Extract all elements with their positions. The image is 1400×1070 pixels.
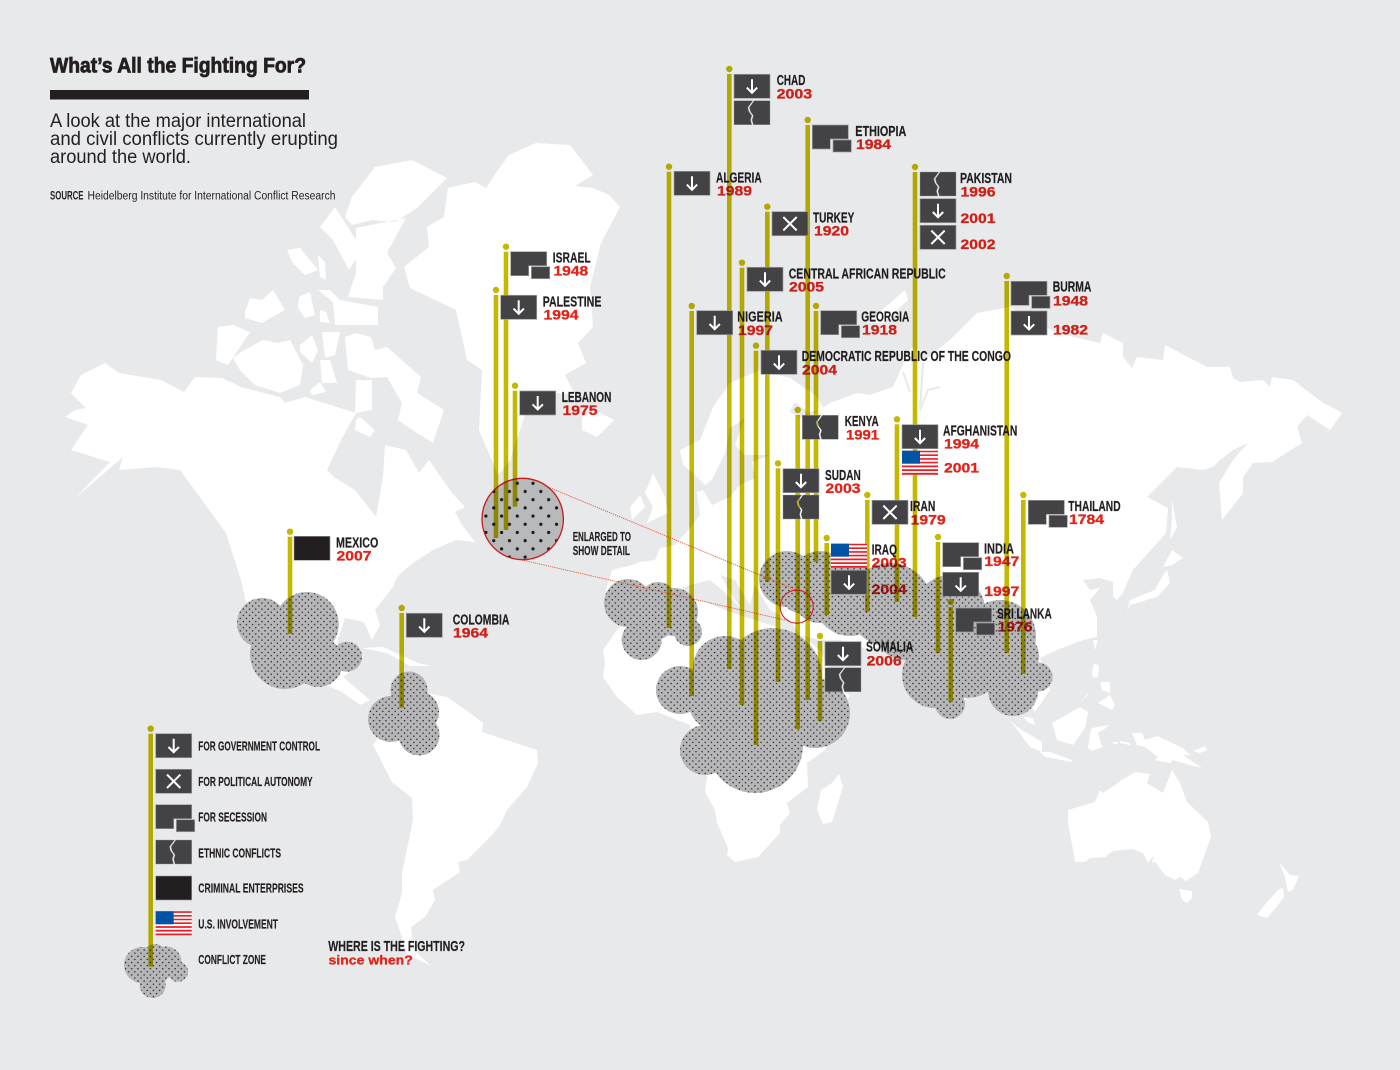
- country: Lebanon: 1975: [562, 403, 598, 418]
- country: Palestine: PALESTINE: [543, 295, 602, 311]
- legend: political autonomy: [156, 769, 313, 793]
- country: Mexico: [287, 528, 378, 634]
- country: Sudan: SUDAN: [825, 468, 861, 484]
- Southeast Asian islands: [1010, 640, 1130, 762]
- Sakhalin: [1170, 500, 1177, 540]
- legend: ethnic conflicts: ETHNIC CONFLICTS: [198, 846, 281, 860]
- country: India: 1997: [984, 584, 1019, 599]
- country: India: [935, 534, 1019, 653]
- New Zealand: [1257, 862, 1299, 918]
- legend: conflict zone label: CONFLICT ZONE: [198, 953, 266, 967]
- country: Democratic Republic of the Congo: [753, 342, 1011, 745]
- country: Afghanistan: 2001: [944, 460, 980, 475]
- Arctic islands: [216, 160, 447, 443]
- country: Ethiopia: 1984: [856, 137, 892, 152]
- country: Turkey: TURKEY: [813, 211, 855, 227]
- connector lines to inset: [522, 487, 796, 620]
- country: Pakistan: 2002: [960, 237, 996, 252]
- country: Nigeria: NIGERIA: [737, 310, 783, 326]
- country: Nigeria: 1997: [738, 323, 773, 338]
- country: Chad: 2003: [777, 86, 813, 101]
- country: Ethiopia: [804, 117, 907, 700]
- country: Burma: 1948: [1053, 293, 1089, 308]
- Madagascar: [817, 774, 843, 824]
- country: Colombia: 1964: [453, 626, 489, 641]
- legend: pole: [148, 726, 154, 967]
- title rule: [50, 90, 309, 100]
- country: Thailand: THAILAND: [1068, 499, 1121, 515]
- legend: criminal enterprises: CRIMINAL ENTERPRISES: [198, 882, 304, 896]
- country: Afghanistan: [894, 416, 1017, 602]
- Japan: [1127, 550, 1183, 612]
- country: Kenya: KENYA: [845, 414, 879, 430]
- legend key heading: WHERE IS THE FIGHTING?: [328, 938, 465, 955]
- legend: ethnic conflicts: [156, 840, 281, 864]
- legend: [120, 726, 320, 1002]
- British Isles: [630, 473, 668, 523]
- country: Turkey: 1920: [814, 224, 849, 239]
- detail marker circle: [780, 590, 813, 623]
- country: Algeria: 1989: [717, 184, 752, 199]
- country: Somalia: SOMALIA: [866, 640, 914, 656]
- country: Colombia: [398, 605, 510, 708]
- legend: secession: FOR SECESSION: [198, 811, 267, 825]
- legend: criminal enterprises: [156, 876, 304, 900]
- country: Lebanon: [512, 382, 611, 507]
- legend: U.S. involvement: [156, 911, 278, 935]
- country: Iraq: 2003: [872, 556, 907, 571]
- world map: [65, 143, 1342, 965]
- zone: North Africa: [604, 579, 702, 660]
- country: Sudan: [775, 460, 861, 682]
- country: Mexico: 2007: [336, 549, 372, 564]
- country: Sudan: 2003: [826, 481, 861, 496]
- country: Chad: [726, 66, 813, 669]
- country: India: 1947: [984, 554, 1019, 569]
- country: Iraq: [824, 535, 907, 615]
- North America: [65, 363, 475, 705]
- country: Palestine: 1994: [544, 308, 579, 322]
- source: SOURCE: [50, 190, 84, 202]
- country: Central African Republic: 2005: [789, 279, 825, 294]
- country: Israel: ISRAEL: [553, 250, 591, 266]
- country: Mexico: MEXICO: [336, 535, 378, 551]
- zone: Sub-Saharan Africa: [650, 625, 855, 797]
- country: Afghanistan: 1994: [944, 436, 980, 451]
- zone: Mexico: [237, 592, 362, 689]
- country: Colombia: COLOMBIA: [453, 613, 510, 629]
- country: India: INDIA: [984, 541, 1014, 557]
- Africa: [603, 600, 850, 862]
- Cuba and Hispaniola: [362, 647, 431, 666]
- subtitle: around the world.: [50, 147, 191, 168]
- subtitle: [50, 111, 338, 168]
- conflict zones: [230, 548, 1055, 797]
- Eurasia: [606, 307, 1342, 715]
- country: Ethiopia: ETHIOPIA: [855, 124, 907, 140]
- country: Burma: 1982: [1053, 323, 1088, 338]
- country: Afghanistan: AFGHANISTAN: [943, 423, 1017, 439]
- country: Central African Republic: CENTRAL AFRICAN REPUBLIC: [789, 266, 946, 282]
- country: Democratic Republic of the Congo: DEMOCRATIC REPUBLIC OF THE CONGO: [802, 349, 1011, 365]
- country: Kenya: 1991: [846, 427, 880, 442]
- country: Kenya: [794, 407, 880, 729]
- legend: conflict zone swatch: [124, 944, 188, 998]
- legend: government control: FOR GOVERNMENT CONTROL: [198, 740, 320, 754]
- country: Pakistan: PAKISTAN: [960, 171, 1012, 187]
- Iceland: [582, 410, 614, 437]
- country: Georgia: 1918: [862, 323, 898, 338]
- zone: Middle East: [759, 551, 933, 660]
- country: Palestine: [493, 287, 602, 538]
- country: Thailand: [1020, 492, 1121, 674]
- country: Algeria: ALGERIA: [716, 170, 762, 186]
- country: Central African Republic: [739, 260, 946, 705]
- legend: political autonomy: FOR POLITICAL AUTONOMY: [198, 775, 313, 789]
- legend: government control: [156, 734, 320, 758]
- country: Pakistan: 2001: [960, 211, 996, 226]
- country: Democratic Republic of the Congo: 2004: [802, 362, 838, 377]
- New Guinea: [1132, 733, 1207, 768]
- country: Iraq: 2004: [872, 582, 907, 597]
- country: Somalia: 2006: [867, 653, 902, 668]
- Novaya Zemlya: [867, 290, 908, 323]
- country: Iran: [864, 492, 946, 612]
- country: Nigeria: [688, 303, 783, 696]
- country: Burma: BURMA: [1053, 280, 1092, 296]
- inset caption: ENLARGED TO: [573, 530, 631, 544]
- country: Algeria: [666, 164, 762, 628]
- country: Georgia: [813, 303, 910, 562]
- inset caption: SHOW DETAIL: [573, 544, 630, 558]
- legend key heading: since when?: [328, 952, 413, 967]
- zone: Colombia: [368, 672, 440, 756]
- country: Somalia: [817, 633, 914, 721]
- Greenland: [404, 143, 620, 475]
- country: Sri Lanka: 1976: [998, 620, 1033, 635]
- country: Lebanon: LEBANON: [562, 390, 611, 406]
- country: Iraq: IRAQ: [872, 542, 897, 558]
- country: Sri Lanka: SRI LANKA: [997, 607, 1052, 623]
- country: Israel: [503, 244, 591, 530]
- country: Iran: IRAN: [910, 499, 935, 515]
- country: Pakistan: 1996: [960, 184, 996, 199]
- legend key heading: [328, 938, 465, 967]
- legend: secession: [156, 805, 267, 832]
- title: What’s All the Fighting For?: [50, 54, 306, 78]
- country: Pakistan: [912, 164, 1012, 617]
- legend: U.S. involvement: U.S. INVOLVEMENT: [198, 917, 278, 931]
- subtitle: and civil conflicts currently erupting: [50, 129, 338, 150]
- country: Thailand: 1784: [1069, 512, 1105, 527]
- inset caption: [573, 530, 631, 558]
- South America: [373, 693, 538, 965]
- source: Heidelberg Institute for International Conflict Research: [88, 190, 336, 202]
- country: Chad: CHAD: [777, 73, 805, 89]
- Tasmania: [1179, 889, 1192, 903]
- country: Sri Lanka: [948, 599, 1052, 702]
- country: Burma: [1004, 273, 1092, 653]
- subtitle: A look at the major international: [50, 111, 306, 132]
- Australia: [1068, 770, 1211, 881]
- country: Georgia: GEORGIA: [861, 310, 910, 326]
- enlarged detail inset: [482, 478, 563, 560]
- country: Israel: 1948: [554, 264, 589, 279]
- country: Iran: 1979: [911, 512, 946, 527]
- zone: South Asia: [902, 576, 1052, 719]
- country: Turkey: [764, 204, 855, 582]
